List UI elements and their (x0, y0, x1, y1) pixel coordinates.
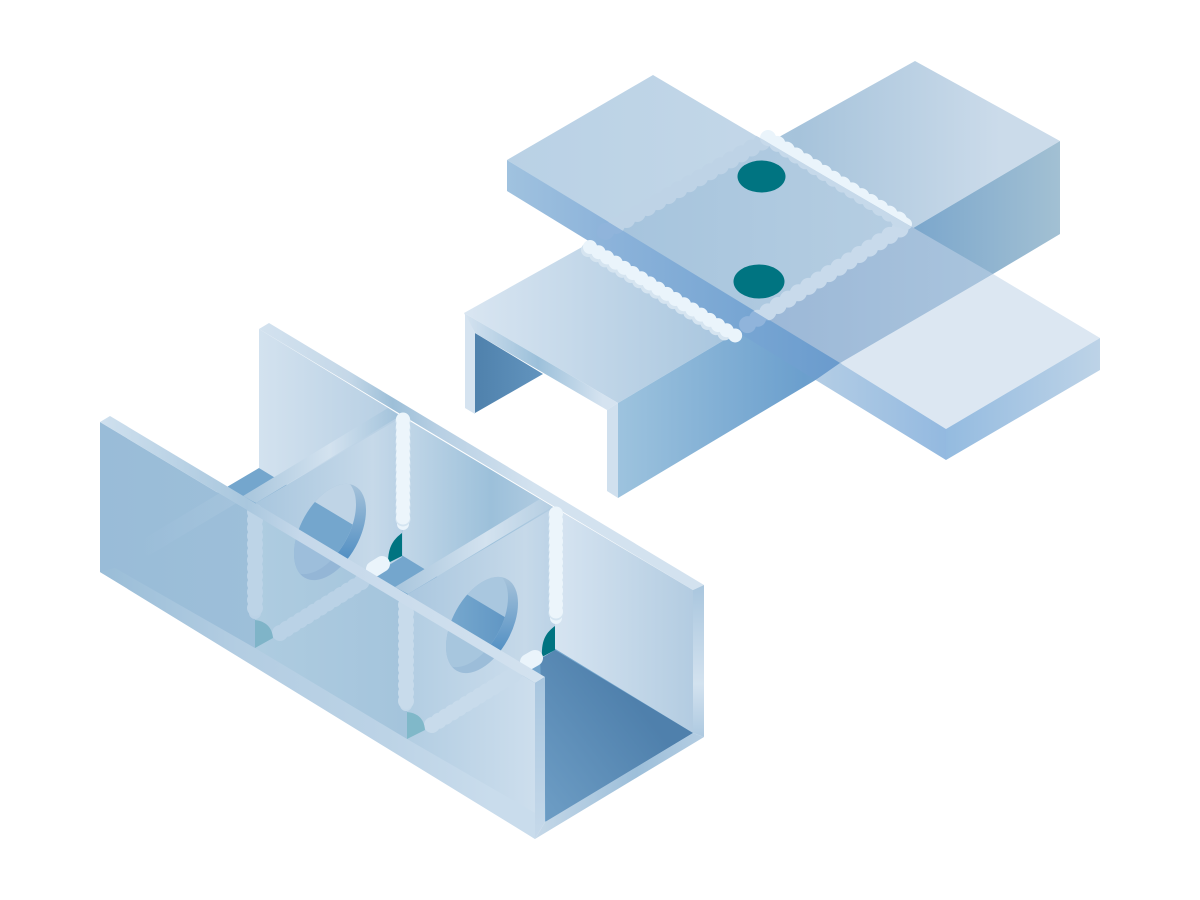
top assembly: channel crossed by flat plate (464, 61, 1100, 498)
channel left leg (465, 313, 475, 414)
partition 1 weld end (374, 564, 382, 569)
far wall section 2 (403, 417, 555, 651)
near wall lower strip (100, 568, 535, 839)
hole: lower teal (734, 264, 784, 298)
ghost weld partition 2 horizontal (432, 672, 518, 725)
partition 1 teal corner (388, 533, 402, 563)
partition 2 face (407, 507, 555, 739)
ghost of hole 2 (446, 631, 494, 674)
plate top over channel side (763, 227, 993, 363)
end left leg (535, 677, 545, 839)
ghost teal corner 2 (407, 712, 425, 739)
near wall middle section (255, 515, 407, 757)
weld seen through plate edge (608, 222, 768, 333)
weld: front visible bead (588, 247, 736, 338)
hole: upper teal (738, 160, 786, 192)
partition 2 teal corner (542, 626, 555, 657)
plate top over white left (507, 75, 768, 228)
near wall top strip (100, 416, 545, 683)
channel floor at open end (540, 650, 693, 822)
ghost weld partition 1 horizontal (280, 578, 368, 633)
channel front edge strip (464, 313, 618, 410)
channel inner dark face (475, 333, 543, 413)
plate end face (946, 338, 1100, 460)
far wall section 3 (555, 508, 693, 733)
weld seen through plate top (603, 138, 906, 325)
end bottom strip (535, 733, 704, 839)
far wall top strip (259, 323, 704, 590)
plate front edge right (816, 363, 946, 460)
partition 1 face (255, 417, 402, 648)
plate top over white right (840, 274, 1100, 429)
partition 1 hole (298, 484, 366, 566)
bottom assembly: U channel with two partitions (100, 323, 704, 839)
partition 1 (243, 408, 410, 576)
partition 1 top strip (243, 408, 400, 503)
ghost weld partition 1 vertical (249, 512, 261, 613)
partition 2 weld end (528, 658, 535, 662)
near wall left section (100, 422, 255, 665)
channel floor (110, 468, 693, 822)
near wall (100, 416, 545, 839)
plate top over channel top (617, 143, 912, 317)
illustration: welded steel channel assemblies (100, 61, 1100, 839)
weld: upper right under plate edge (768, 138, 906, 224)
partition 1 vertical weld (397, 420, 409, 524)
ghost weld partition 2 vertical (400, 605, 412, 705)
plate front edge (507, 160, 840, 380)
partition 2 top strip (395, 499, 552, 594)
ghost of hole 1 (294, 540, 340, 580)
near wall ghost strip (132, 488, 245, 556)
open end frame (535, 585, 704, 839)
near wall right section (407, 606, 535, 839)
channel side face (618, 141, 1060, 498)
far wall section 1 (259, 329, 403, 560)
channel top face (464, 61, 1060, 403)
partition 2 vertical weld (550, 514, 562, 618)
partition 2 (395, 499, 563, 669)
partition 2 hole (451, 576, 518, 658)
ghost teal corner 1 (255, 620, 273, 648)
end right leg (693, 585, 704, 737)
channel right leg (607, 403, 618, 498)
